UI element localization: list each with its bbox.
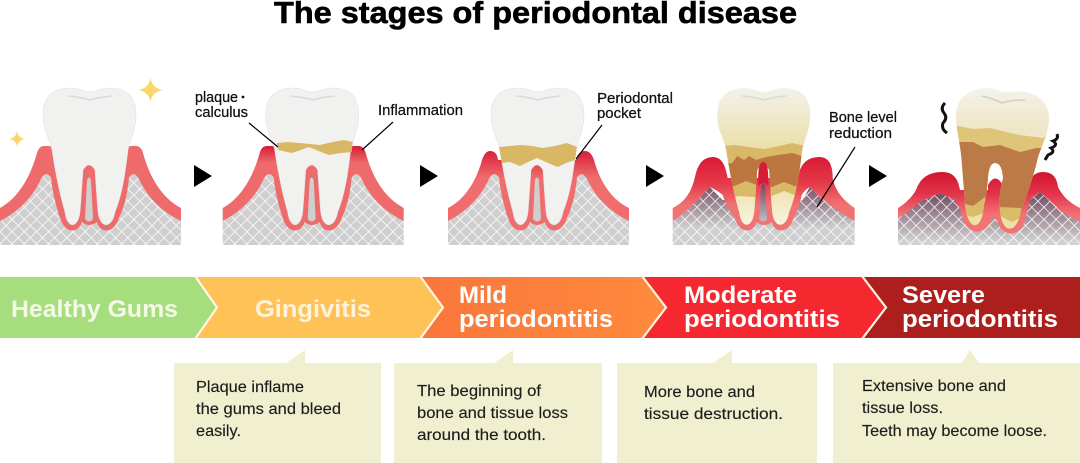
- callout: gingivitis: easily.: [196, 423, 241, 440]
- stage band: gingivitis: [180, 276, 443, 339]
- icon: right shake mark: [1045, 134, 1058, 160]
- icon: left shake mark: [942, 103, 947, 133]
- illustration: moderate periodontitis tooth: [673, 88, 855, 245]
- label: periodontal pocket: Periodontal: [597, 91, 673, 107]
- stage band: healthy gums: Healthy Gums: [11, 296, 178, 323]
- illustration: gingivitis tooth: [223, 88, 404, 245]
- stage band: healthy gums: [0, 276, 217, 339]
- icon: small sparkle: [9, 131, 25, 147]
- arrow: gingivitis to mild: [420, 165, 438, 187]
- plaque band: [277, 140, 353, 155]
- illustration: mild periodontitis tooth: [448, 88, 629, 245]
- arrow: healthy to gingivitis: [194, 165, 212, 187]
- illustration: healthy gums tooth: [0, 88, 181, 245]
- callout: mild periodontitis: [394, 350, 602, 463]
- stage band: moderate periodontitis: Moderate: [684, 282, 797, 309]
- stage band: severe periodontitis: Severe: [902, 282, 985, 309]
- label: inflammation: [362, 103, 463, 150]
- arrow: moderate to severe: [869, 165, 887, 187]
- stage band: severe periodontitis: [840, 277, 1080, 338]
- callout: severe periodontitis: tissue loss.: [862, 400, 943, 417]
- callout: severe periodontitis: [833, 350, 1080, 463]
- arrow: mild to moderate: [646, 165, 664, 187]
- illustration: severe periodontitis tooth: [898, 88, 1080, 245]
- stage band: severe periodontitis: periodontitis: [902, 306, 1058, 333]
- stage band: moderate periodontitis: [620, 276, 886, 339]
- label: plaque calculus: calculus: [195, 105, 248, 121]
- label: plaque calculus: [195, 90, 278, 147]
- label: bone level reduction: [817, 110, 897, 207]
- stage band: gingivitis: Gingivitis: [255, 296, 371, 323]
- callout: mild periodontitis: The beginning of: [417, 383, 542, 400]
- callout: moderate periodontitis: More bone and: [644, 384, 755, 401]
- callout: gingivitis: the gums and bleed: [196, 401, 341, 418]
- callout: mild periodontitis: bone and tissue loss: [417, 405, 568, 422]
- label: inflammation: Inflammation: [378, 103, 463, 119]
- stage band: mild periodontitis: periodontitis: [459, 306, 613, 333]
- callout: severe periodontitis: Extensive bone and: [862, 378, 1006, 395]
- callout: mild periodontitis: around the tooth.: [417, 427, 546, 444]
- tooth with calculus: [956, 88, 1049, 229]
- plaque band: [499, 143, 577, 167]
- tooth with calculus: [717, 88, 810, 225]
- callout: gingivitis: [174, 350, 381, 463]
- callout: gingivitis: Plaque inflame: [196, 379, 304, 396]
- label: bone level reduction: reduction: [829, 126, 892, 142]
- label: periodontal pocket: pocket: [597, 106, 641, 122]
- stage band: mild periodontitis: [400, 276, 666, 339]
- icon: large sparkle: [138, 78, 162, 102]
- gum: [673, 157, 855, 231]
- label: bone level reduction: Bone level: [829, 110, 897, 126]
- label: plaque calculus: plaque: [195, 90, 238, 106]
- gum: [898, 172, 1080, 234]
- callout: moderate periodontitis: tissue destruction.: [644, 406, 783, 423]
- label: periodontal pocket: [576, 91, 673, 159]
- callout: severe periodontitis: Teeth may become loose.: [862, 423, 1047, 440]
- septum: [758, 162, 768, 186]
- stage band: moderate periodontitis: periodontitis: [684, 306, 840, 333]
- callout: moderate periodontitis: [617, 350, 817, 463]
- stage band: mild periodontitis: Mild: [459, 282, 507, 309]
